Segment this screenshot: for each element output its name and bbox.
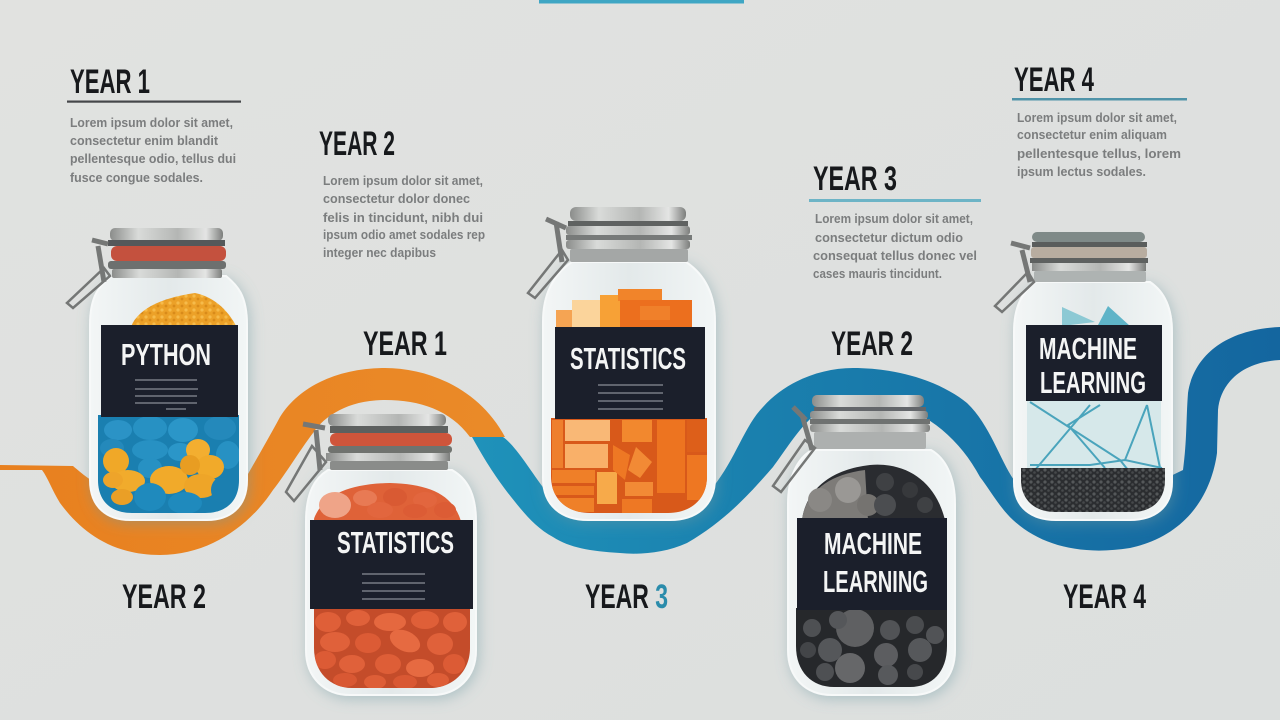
jar 3 glass body	[543, 262, 715, 520]
blue ribbon path	[472, 327, 1280, 554]
panel: year 4 text block	[1012, 61, 1187, 179]
jar 1 contents	[95, 293, 245, 515]
text: year 3 description: Lorem ipsum dolor sit amet,	[815, 211, 973, 226]
jar 5 clasp	[995, 243, 1034, 312]
text: year 4 description	[1017, 110, 1181, 179]
jar 2 clasp	[286, 424, 326, 501]
jar 2 lid	[326, 414, 452, 470]
text: year 1 description: Lorem ipsum dolor sit amet,	[70, 115, 233, 130]
text: year 2 description: consectetur dolor donec	[323, 191, 470, 206]
jar 2 glass body	[306, 470, 476, 695]
jar 3 lid	[566, 207, 692, 262]
jar 5 lid	[1030, 232, 1148, 282]
jar 5 contents	[1020, 306, 1166, 514]
jar 4 glass body	[788, 450, 955, 695]
heading: year 3: YEAR 3	[813, 160, 897, 198]
jar 2 label	[310, 520, 473, 609]
jar 3 clasp	[528, 219, 568, 298]
panel: year 1 text block	[67, 63, 241, 185]
heading: year 2: YEAR 2	[319, 125, 395, 163]
text: year 2 description: felis in tincidunt, nibh dui	[323, 210, 483, 225]
jar 1 lid	[108, 228, 226, 278]
label: ribbon year 2 blue: YEAR 2	[831, 325, 913, 363]
jar 3 label	[555, 327, 705, 419]
text: year 2 description: ipsum odio amet sodales rep	[323, 227, 485, 242]
text: year 2 description	[323, 173, 485, 260]
jar 4 contents	[796, 465, 951, 693]
jar 5 glass body	[1014, 282, 1172, 520]
panel: year 2 text block	[319, 125, 485, 260]
heading: year 1: YEAR 1	[70, 63, 150, 101]
heading: year 4: YEAR 4	[1014, 61, 1094, 99]
jar: statistics upper	[528, 207, 715, 520]
text: year 4 description: Lorem ipsum dolor sit amet,	[1017, 110, 1177, 125]
jar 5 label: MACHINE	[1039, 331, 1137, 366]
text: year 1 description: pellentesque odio, tellus dui	[70, 151, 236, 166]
jar 4 label: MACHINE	[824, 526, 922, 561]
jar: machine learning lower	[773, 395, 955, 695]
text: year 4 description: pellentesque tellus, lorem	[1017, 146, 1181, 161]
jar 4 label: LEARNING	[823, 564, 928, 599]
top accent bar	[539, 0, 744, 4]
jar 2 label: STATISTICS	[337, 525, 454, 560]
jar 1 label: PYTHON	[121, 337, 211, 372]
label: ribbon year 3 lower: YEAR 3	[585, 578, 668, 616]
text: year 4 description: ipsum lectus sodales.	[1017, 164, 1146, 179]
jar 1 label	[101, 325, 238, 417]
text: year 3 description: consectetur dictum odio	[815, 230, 963, 245]
jar: statistics lower	[286, 414, 476, 695]
jar 4 label	[797, 518, 947, 610]
text: year 1 description: consectetur enim blandit	[70, 133, 219, 148]
jar: python	[67, 228, 247, 520]
text: year 1 description	[70, 115, 236, 185]
text: year 3 description	[813, 211, 977, 281]
jar 5 label: LEARNING	[1040, 365, 1146, 400]
label: ribbon year 4 lower: YEAR 4	[1063, 578, 1146, 616]
label: ribbon year 2 lower: YEAR 2	[122, 578, 206, 616]
text: year 2 description: Lorem ipsum dolor sit amet,	[323, 173, 483, 188]
jar 3 contents	[551, 289, 711, 518]
jar 4 clasp	[773, 407, 815, 492]
orange ribbon path	[0, 368, 505, 555]
jar 4 lid	[810, 395, 930, 449]
text: year 1 description: fusce congue sodales.	[70, 170, 203, 185]
text: year 2 description: integer nec dapibus	[323, 245, 436, 260]
text: year 4 description: consectetur enim aliquam	[1017, 127, 1167, 142]
label: ribbon year 1 orange: YEAR 1	[363, 325, 447, 363]
jar 1 glass body	[90, 276, 247, 520]
panel: year 3 text block	[809, 160, 981, 281]
jar: machine learning upper	[995, 232, 1172, 520]
jar 1 clasp	[67, 240, 110, 308]
jar 5 label	[1026, 325, 1162, 401]
text: year 3 description: consequat tellus donec vel	[813, 248, 977, 263]
jar 3 label: STATISTICS	[570, 341, 686, 376]
text: year 3 description: cases mauris tincidunt.	[813, 266, 942, 281]
jar 2 contents	[310, 483, 475, 695]
